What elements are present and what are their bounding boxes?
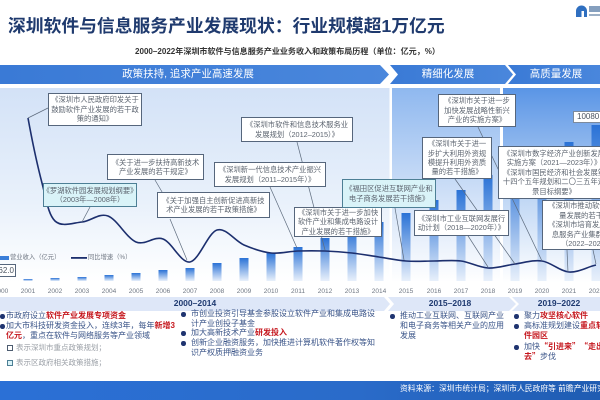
- callout: foreign investment measures: 模提升利用外资质: [428, 158, 486, 167]
- stage header band: [0, 65, 600, 84]
- text block: 2000-2014 right measures: 创新企业融资服务，加快推进计算机软件著作权等知: [191, 338, 375, 347]
- text block: 2000-2014 left measures: 市政府设立软件产业发展专项资金: [6, 311, 126, 320]
- callout: Luohu software park plan: [43, 183, 137, 207]
- text block: 2019-2022 measures: 去”步伐: [524, 351, 556, 362]
- period label: 2000-2014: 2000–2014: [174, 298, 216, 308]
- callout: strategic emerging industries: [438, 94, 516, 127]
- chart: revenue bars and growth line: 2019: [508, 288, 523, 295]
- callout: software and IC measures: 《深圳市关于进一步加快: [298, 208, 378, 217]
- chart: revenue bars and growth line: 2012: [318, 288, 333, 295]
- callout: high-tech regulation: 《关于进一步扶持高新技术: [112, 158, 199, 167]
- text block: 2019-2022 measures: 件园区: [524, 331, 548, 340]
- stage heading: high quality: 高质量发展: [530, 68, 582, 80]
- chart: revenue bars and growth line: 2021: [562, 288, 577, 295]
- text block: 2015-2018 measures: 和电子商务等相关产业的应用: [400, 321, 504, 330]
- callout: Luohu software park plan: 《罗湖软件园发展规划纲要》: [43, 186, 137, 195]
- callout: 2000 policy notice: 《深圳市人民政府印发关于: [51, 95, 139, 104]
- text block: 2015-2018 measures: 发展: [400, 331, 416, 340]
- chart: revenue bars and growth line: 2013: [345, 288, 360, 295]
- text block: 2000-2014 right measures: 加大高新技术产业研发投入: [191, 328, 287, 337]
- callout: software services plan: [241, 117, 353, 142]
- legend: revenue and growth: 营业收入（亿元）: [10, 254, 60, 261]
- callout: 2000 policy notice: 策的通知》: [77, 114, 113, 123]
- footer source bar: [0, 381, 600, 400]
- chart: revenue bars and growth line: 2004: [102, 288, 117, 295]
- callout: next-generation IT plan: [214, 162, 326, 187]
- callout: foreign investment measures: 步扩大利用外资规: [428, 149, 486, 158]
- text block: 2000-2014 left measures: [0, 310, 175, 340]
- chart: revenue bars and growth line: 2016: [427, 288, 442, 295]
- text block: 2000-2014 right measures: 识产权质押融资业务: [191, 348, 263, 357]
- callout: 2000 policy notice: [48, 93, 142, 126]
- text block: 2015-2018 measures: [390, 311, 504, 340]
- callout: foreign investment measures: 量的若干措施》: [431, 167, 483, 176]
- callout: Futian internet measures: 《福田区促进互联网产业和: [345, 184, 433, 193]
- text block: 2019-2022 measures: [514, 310, 600, 362]
- period label: 2015-2018: 2015–2018: [429, 298, 471, 308]
- text block: 2000-2014 left measures: 亿元，重点在软件与网络服务等产业领域: [6, 331, 150, 340]
- text block: 2015-2018 measures: 推动工业互联网、互联网产业: [400, 311, 504, 320]
- chart: revenue bars and growth line: 2020: [535, 288, 550, 295]
- text block: 2000-2014 left measures: 加大市科技研发资金投入，连续3年，每年新增3: [6, 321, 175, 330]
- callout: strategic emerging industries: 产业的实施方案》: [448, 115, 506, 124]
- callout: high-tech regulation: [107, 154, 204, 180]
- callout: software and IC measures: [294, 207, 382, 237]
- title: 深圳软件与信息服务产业发展现状：行业规模超1万亿元: [8, 16, 445, 36]
- callout: industrial internet plan: [414, 210, 509, 236]
- text block: 2000-2014 right measures: [181, 309, 375, 357]
- chart: revenue bars and growth line: 2010: [264, 288, 279, 295]
- callout: Futian internet measures: 电子商务发展若干措施》: [349, 194, 429, 202]
- callout: 2000 policy notice: 鼓励软件产业发展的若干政: [51, 105, 139, 114]
- chart: revenue bars and growth line: 2018: [481, 288, 496, 295]
- callout: Luohu software park plan: （2003年—2008年）: [56, 195, 124, 204]
- callout: digital economy and five-year plan: 景目标纲要》: [532, 187, 576, 196]
- callout: strategic emerging industries: 《深圳市关于进一步: [444, 96, 510, 105]
- period label: 2019-2022: 2019–2022: [538, 298, 580, 308]
- callout: foreign investment measures: 《深圳市关于进一: [428, 139, 486, 148]
- callout: industrial internet plan: 《深圳市工业互联网发展行: [418, 214, 505, 223]
- legend: policy box types: 表示深圳市重点政策规划；: [16, 343, 106, 352]
- callout: digital economy and five-year plan: [498, 146, 600, 199]
- legend: policy box types: [7, 343, 106, 367]
- callout: high-tech independent innovation: 术产业发展的若干政策措施》: [166, 205, 261, 214]
- chart: revenue bars and growth line: 2009: [237, 288, 252, 295]
- stage heading: policy support: 政策扶持, 追求产业高速发展: [122, 68, 254, 80]
- callout: next-generation IT plan: 发展规划（2011–2015年）》: [225, 174, 315, 184]
- callout: software and IC measures: 软件产业和集成电路设计: [298, 217, 378, 226]
- value label: 2000: [0, 264, 16, 277]
- chart subtitle: 2000–2022年深圳市软件与信息服务产业业务收入和政策布局历程（单位：亿元，%）: [135, 47, 440, 56]
- chart: revenue bars and growth line: 2006: [156, 288, 171, 295]
- callout: high-tech regulation: 产业发展的若干规定》: [119, 167, 192, 176]
- text block: 2000-2014 right measures: 市创业投资引导基金参股设立软件产业和集成电路设: [191, 309, 375, 318]
- chart: revenue bars and growth line: 2002: [48, 288, 63, 295]
- legend: policy box types: 表示区政府相关政策措施；: [16, 358, 106, 367]
- stage heading: refinement: 精细化发展: [422, 68, 474, 80]
- icon: logo: [576, 6, 600, 17]
- chart: revenue bars and growth line: 2017: [454, 288, 469, 295]
- chart: revenue bars and growth line: 2008: [210, 288, 225, 295]
- chart: revenue bars and growth line: 2005: [129, 288, 144, 295]
- callout: software services plan: 发展规划（2012–2015）》: [255, 130, 339, 138]
- chart: revenue bars and growth line: 2003: [75, 288, 90, 295]
- callout: software quality and cluster plan: [542, 200, 600, 250]
- chart: revenue bars and growth line: 2014: [372, 288, 387, 295]
- callout: industrial internet plan: 动计划（2018—2020年）》: [418, 223, 505, 232]
- callout: digital economy and five-year plan: 实施方案（2021—2023年）》: [507, 158, 600, 167]
- callout: high-tech independent innovation: 《关于加强自主创新促进高新技: [162, 196, 265, 205]
- value label: 2022: [573, 111, 600, 123]
- callout: next-generation IT plan: 《深圳新一代信息技术产业振兴: [219, 165, 321, 174]
- callout: strategic emerging industries: 加快发展战略性新兴: [444, 106, 510, 115]
- chart: revenue bars and growth line: 2001: [21, 288, 36, 295]
- callout: software and IC measures: 产业发展的若干措施》: [302, 227, 374, 236]
- chart: revenue bars and growth line: 2015: [399, 288, 414, 295]
- callout: Futian internet measures: [342, 179, 436, 208]
- legend: revenue and growth: [0, 254, 131, 261]
- callout: foreign investment measures: [422, 137, 492, 179]
- text block: 2000-2014 right measures: 计产业创投子基金: [191, 319, 255, 328]
- period band: [0, 297, 600, 311]
- callout: software services plan: 《深圳市软件和信息技术服务业: [246, 120, 348, 129]
- text block: 2019-2022 measures: 聚力攻坚核心软件: [524, 311, 588, 320]
- chart: revenue bars and growth line: 2011: [291, 288, 305, 295]
- legend: revenue and growth: 同比增速（%）: [88, 254, 131, 261]
- chart: revenue bars and growth line: 2007: [183, 288, 198, 295]
- callout: high-tech independent innovation: [157, 192, 270, 218]
